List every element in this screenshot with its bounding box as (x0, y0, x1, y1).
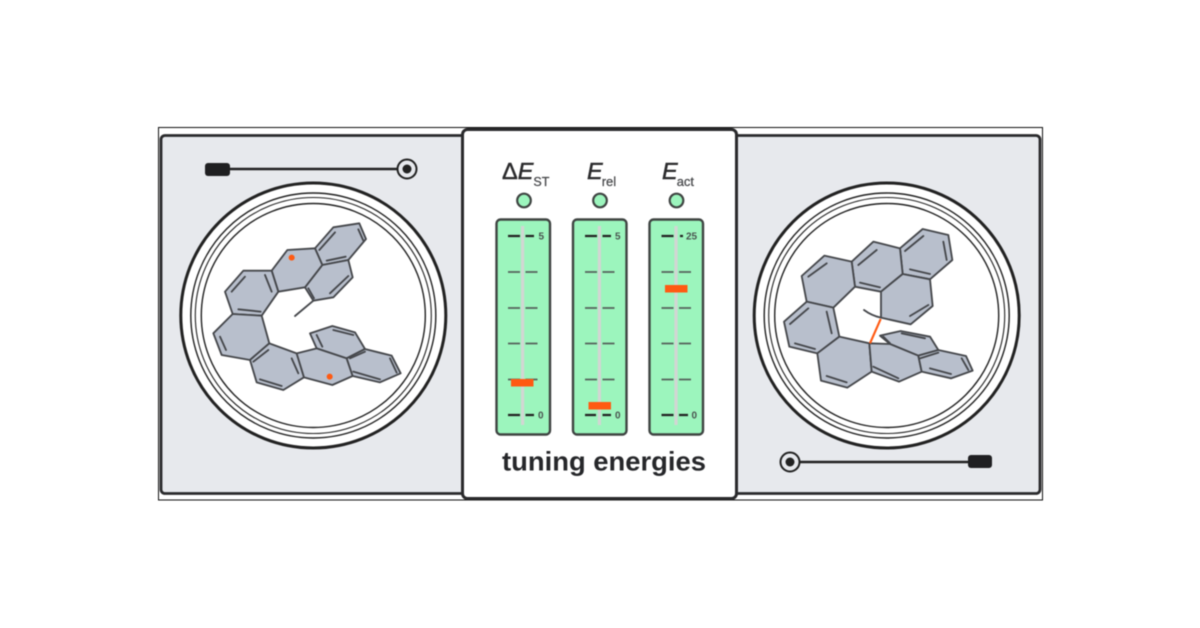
molecule: left open-shell structure (213, 223, 401, 390)
panel: left reactant (161, 136, 481, 494)
label: delta E ST: ΔE (502, 158, 533, 184)
panel: tuning energies control (462, 130, 736, 498)
icon: left dial (181, 183, 446, 448)
icon: left switch slider (205, 160, 416, 178)
panel: right product (720, 136, 1040, 494)
label: E rel: rel (602, 174, 616, 189)
slider: E act: 0 (692, 410, 698, 422)
slider: delta E ST (496, 220, 550, 434)
heading: tuning energies: tuning energies (502, 446, 706, 476)
molecule: right bonded structure (784, 229, 973, 388)
slider: delta E ST: 0 (538, 410, 544, 422)
slider: delta E ST: 5 (538, 232, 544, 242)
icon: right switch slider (780, 452, 992, 472)
slider: E rel (573, 220, 626, 434)
label: delta E ST: ST (533, 175, 550, 189)
indicator lights (517, 194, 683, 207)
slider: E rel: 0 (615, 410, 621, 422)
label: E rel: E (587, 158, 603, 184)
label: E act: E (662, 158, 678, 184)
label: E act: act (677, 174, 694, 189)
slider: E act: 25 (686, 232, 698, 242)
slider: E act (650, 220, 703, 434)
slider: E rel: 5 (615, 232, 621, 242)
icon: right dial (754, 183, 1019, 448)
